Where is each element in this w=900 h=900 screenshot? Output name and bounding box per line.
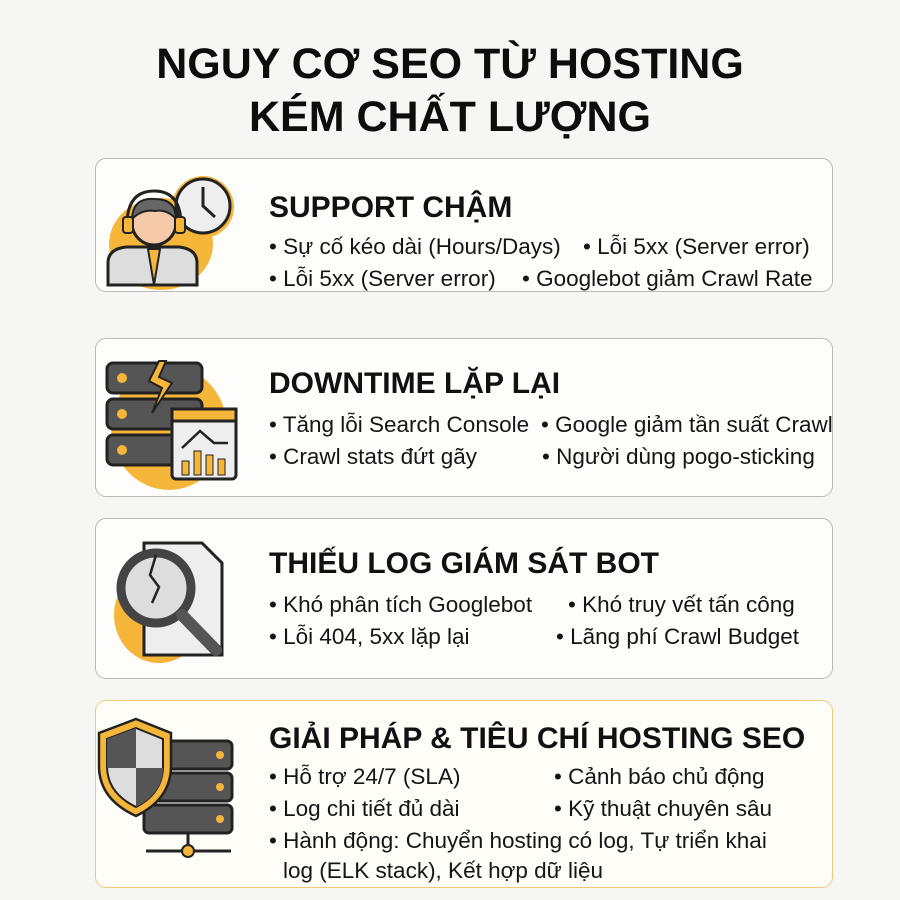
panel: downtime lặp lại: • Google giảm tần suất Crawl <box>541 412 833 437</box>
bullets <box>269 592 799 649</box>
icon: magnifier over document <box>114 542 224 663</box>
panel: downtime lặp lại: • Crawl stats đứt gãy <box>269 444 477 469</box>
heading: THIẾU LOG GIÁM SÁT BOT <box>269 547 659 580</box>
panel: giải pháp: • Hỗ trợ 24/7 (SLA) <box>269 764 460 789</box>
panel: downtime lặp lại: • Người dùng pogo-sticking <box>542 444 815 469</box>
panel: giải pháp: • Cảnh báo chủ động <box>554 764 765 789</box>
panel: thiếu log giám sát bot: • Khó truy vết tấn công <box>568 592 795 617</box>
panel: giải pháp: • Kỹ thuật chuyên sâu <box>554 796 772 821</box>
panel: thiếu log giám sát bot: • Khó phân tích Googlebot <box>269 592 532 617</box>
panel: giải pháp: • Hành động: Chuyển hosting có log, Tự triển khai <box>269 828 767 853</box>
panel: giải pháp: • Log chi tiết đủ dài <box>269 796 460 821</box>
icon: broken server with chart <box>106 360 238 490</box>
panel: thiếu log giám sát bot <box>95 518 833 679</box>
icon: support agent with clock <box>106 176 234 290</box>
bullets <box>269 234 813 291</box>
panel: thiếu log giám sát bot: • Lãng phí Crawl Budget <box>556 624 799 649</box>
panel: support chậm <box>95 158 833 292</box>
title <box>156 40 744 141</box>
panel: support chậm: • Lỗi 5xx (Server error) <box>269 266 496 291</box>
panel: support chậm: • Lỗi 5xx (Server error) <box>583 234 810 259</box>
panel: downtime lặp lại <box>95 338 833 497</box>
bullets <box>269 412 833 469</box>
panel: thiếu log giám sát bot: • Lỗi 404, 5xx lặp lại <box>269 624 470 649</box>
bullets <box>269 764 772 883</box>
title: NGUY CƠ SEO TỪ HOSTING <box>156 40 744 88</box>
panel: support chậm: • Sự cố kéo dài (Hours/Days) <box>269 234 561 259</box>
icon: shield with server <box>98 718 234 858</box>
heading: SUPPORT CHẬM <box>269 191 512 224</box>
panel: giải pháp <box>95 700 833 888</box>
panel: support chậm: • Googlebot giảm Crawl Rate <box>522 266 813 291</box>
panel: downtime lặp lại: • Tăng lỗi Search Console <box>269 412 529 437</box>
heading: GIẢI PHÁP & TIÊU CHÍ HOSTING SEO <box>269 722 805 755</box>
title: KÉM CHẤT LƯỢNG <box>249 93 651 141</box>
heading: DOWNTIME LẶP LẠI <box>269 367 560 400</box>
panel: giải pháp: log (ELK stack), Kết hợp dữ liệu <box>283 858 603 883</box>
